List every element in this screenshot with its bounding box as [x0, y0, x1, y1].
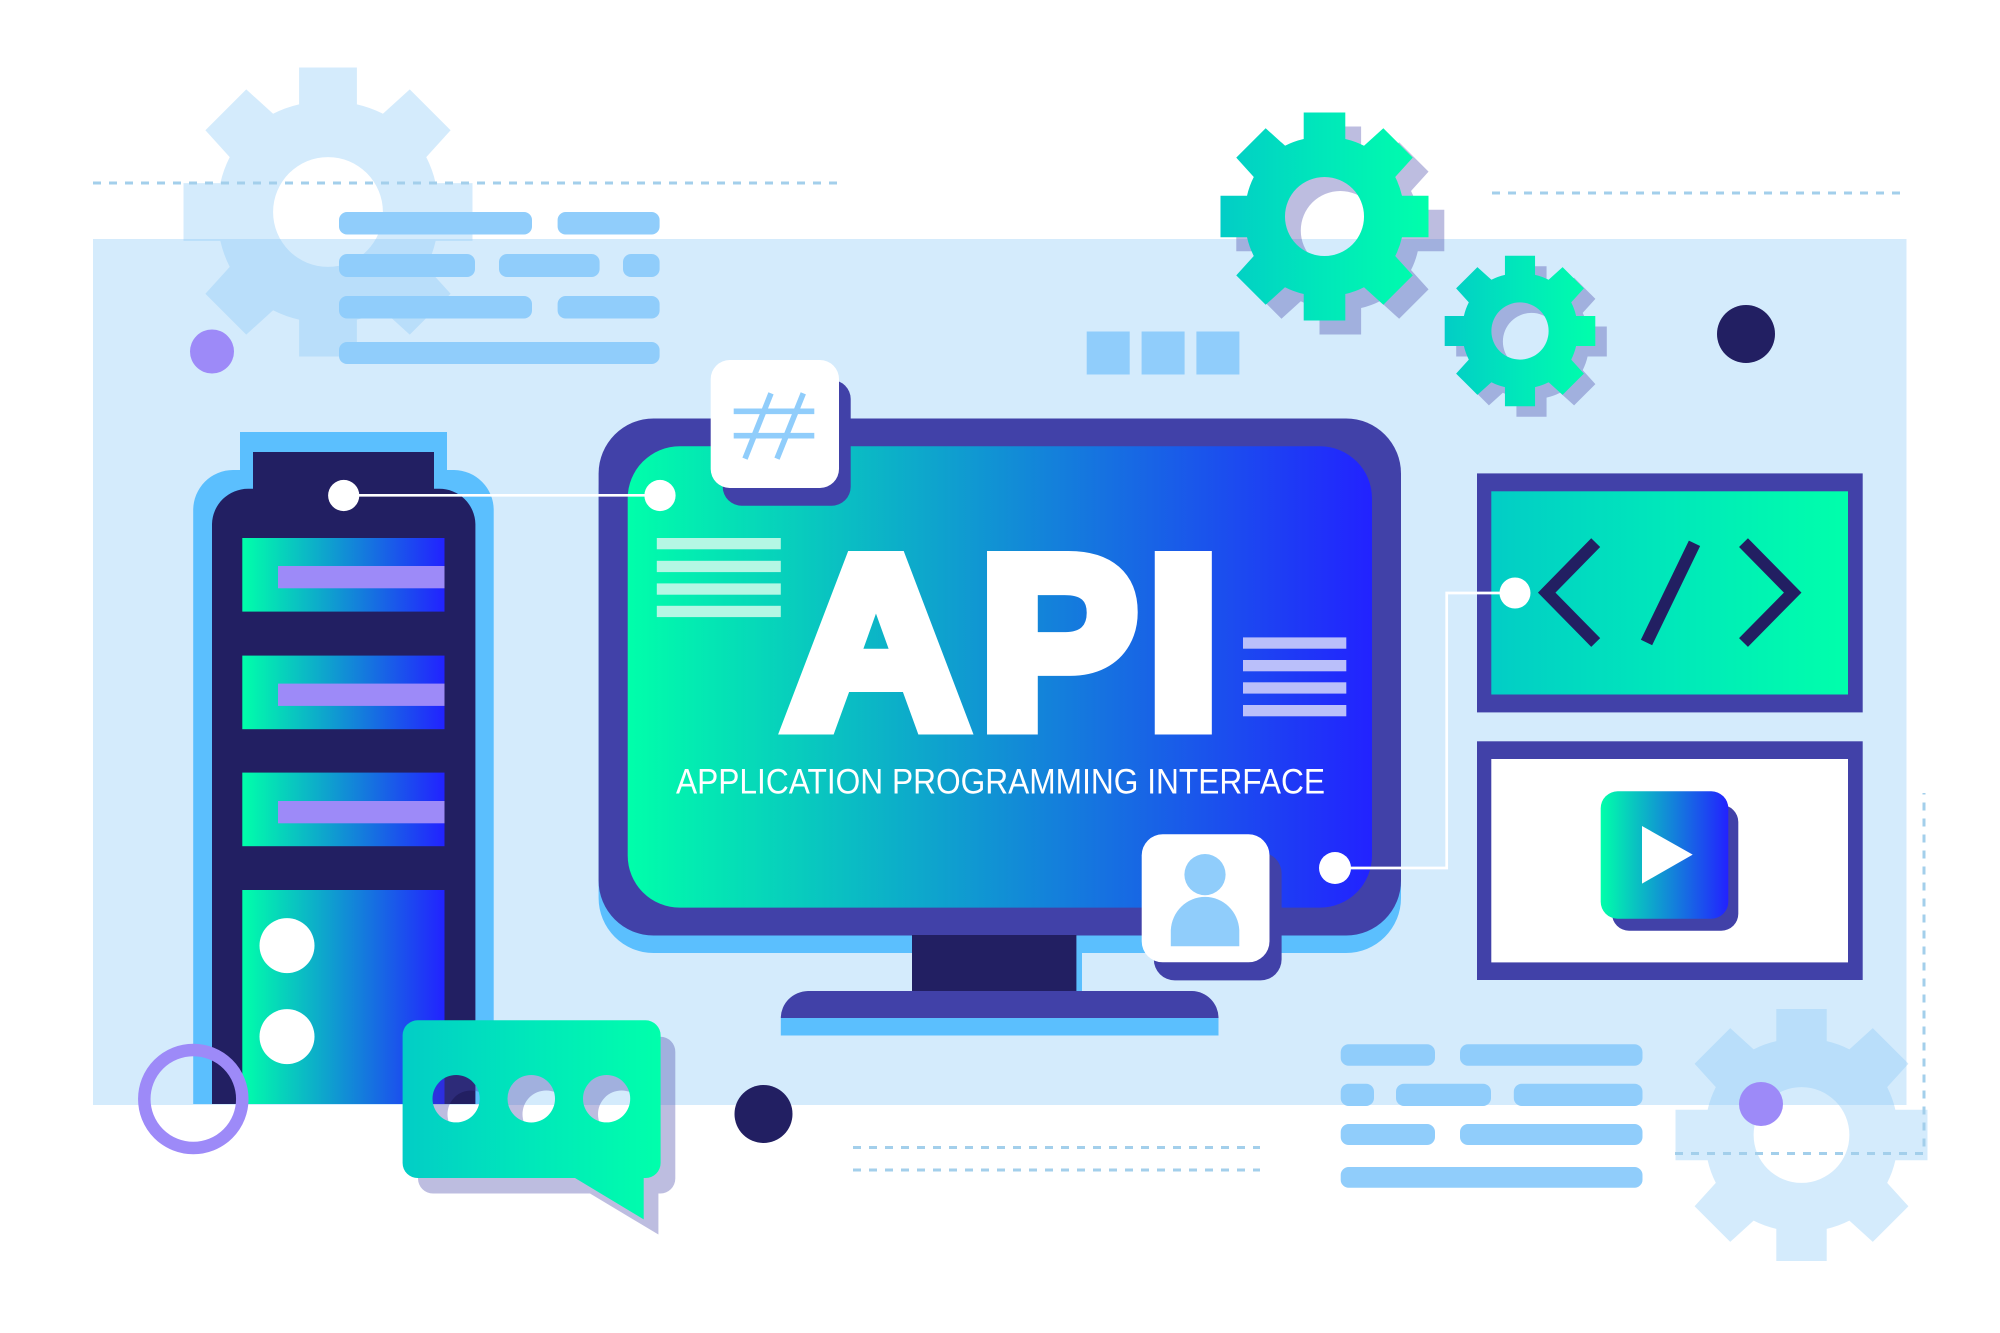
navy dot bottom	[734, 1085, 792, 1143]
hash card	[711, 360, 851, 506]
dashed lines bottom centre	[853, 1148, 1260, 1170]
icon: code brackets	[1547, 543, 1793, 642]
icon: hash	[734, 393, 814, 459]
purple dot top left	[190, 330, 234, 374]
text placeholder bars bottom right	[1341, 1044, 1642, 1188]
navy dot top right	[1717, 305, 1775, 363]
monitor stand shadow	[912, 930, 1082, 991]
connector server to monitor	[328, 480, 676, 511]
decorative gear bottom right	[1676, 1009, 1928, 1261]
video window	[1477, 741, 1863, 980]
connector monitor to code window	[1319, 578, 1530, 884]
server drive 2	[242, 656, 444, 729]
server drive 3	[242, 773, 444, 846]
icon: person	[1171, 854, 1239, 946]
code window	[1477, 473, 1863, 712]
monitor screen	[628, 446, 1372, 908]
purple dot bottom right	[1739, 1082, 1783, 1126]
server drive 1	[242, 538, 444, 612]
screen lines right	[1243, 637, 1346, 716]
person card	[1142, 834, 1282, 980]
server lower bay	[242, 890, 444, 1104]
monitor	[599, 418, 1401, 1036]
background panel	[93, 239, 1906, 1105]
chat bubble	[403, 1020, 675, 1234]
monitor neck	[912, 935, 1076, 991]
decorative gear top left	[184, 68, 472, 357]
three squares	[1087, 332, 1239, 374]
screen lines left	[657, 538, 781, 617]
API title: A	[784, 508, 968, 778]
dashed line top right	[1492, 192, 1900, 194]
API title: I	[1146, 508, 1220, 778]
monitor base	[781, 991, 1219, 1036]
large green gear	[1220, 112, 1444, 334]
dashed line top left	[93, 182, 838, 184]
purple ring	[144, 1050, 242, 1148]
API title: P	[980, 508, 1138, 778]
server tower	[193, 432, 494, 1104]
text placeholder bars top left	[339, 212, 660, 364]
dashed corner line bottom right	[1675, 793, 1924, 1154]
monitor frame shadow	[599, 436, 1401, 953]
subtitle: APPLICATION PROGRAMMING INTERFACE	[676, 762, 1325, 802]
monitor frame	[599, 418, 1401, 936]
small green gear	[1445, 256, 1607, 417]
icon: play button	[1601, 791, 1738, 931]
